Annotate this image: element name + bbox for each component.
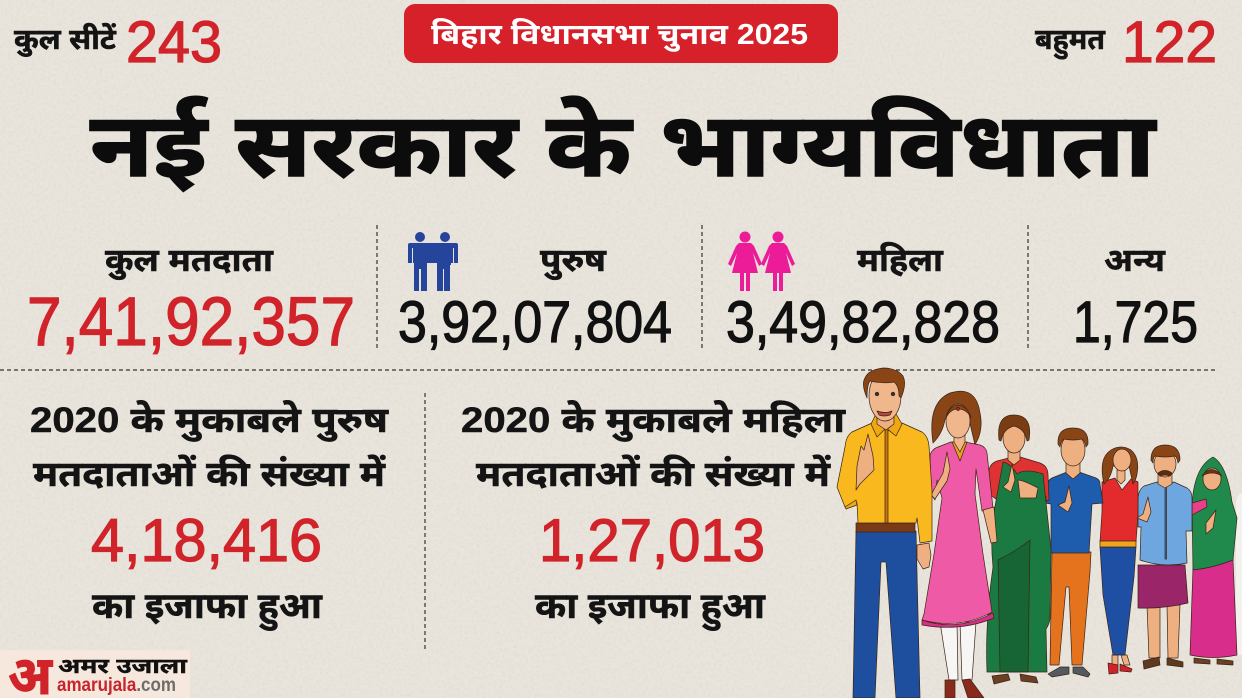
header pill	[404, 4, 838, 63]
stat: total voters: कुल मतदाता	[105, 242, 274, 280]
person 4: man in blue t-shirt	[1045, 428, 1103, 677]
total seats: 243	[126, 10, 222, 75]
panel: female voter increase	[461, 400, 846, 631]
person 5: woman in red top	[1100, 447, 1138, 674]
logo: अमर उजाला	[58, 655, 188, 678]
panel: male voter increase	[30, 400, 389, 631]
title: नई सरकार के भाग्यविधाता	[90, 95, 1157, 195]
person 3: woman in green saree	[987, 415, 1051, 684]
majority: 122	[1122, 10, 1217, 75]
person 2: woman in pink kurta	[922, 391, 997, 698]
panel: female voter increase: 1,27,013	[539, 507, 765, 574]
stat: female voters	[726, 232, 1000, 355]
icon: two women	[728, 232, 795, 291]
panel: female voter increase: मतदाताओं की संख्या में	[476, 454, 831, 494]
total seats: कुल सीटें	[14, 23, 117, 57]
icon: two men	[408, 232, 458, 291]
majority: बहुमत	[1035, 24, 1106, 60]
header pill: बिहार विधानसभा चुनाव 2025	[431, 18, 808, 52]
illustration: voters	[837, 368, 1242, 698]
stat: male voters: पुरुष	[540, 242, 607, 280]
majority	[1035, 10, 1217, 75]
stat: other voters: 1,725	[1073, 290, 1198, 355]
logo	[0, 646, 190, 698]
stat: total voters: 7,41,92,357	[27, 283, 355, 360]
person 1: man in yellow shirt	[837, 368, 932, 698]
panel: male voter increase: का इजाफा हुआ	[92, 585, 323, 631]
stat: male voters	[398, 232, 672, 355]
total seats	[14, 10, 222, 75]
stat: female voters: महिला	[857, 242, 944, 278]
person 8 edge	[1236, 493, 1242, 655]
panel: female voter increase: का इजाफा हुआ	[535, 585, 766, 631]
logo: amarujala.com	[57, 675, 176, 696]
stat: other voters: अन्य	[1104, 242, 1166, 278]
person 6: man in blue shirt	[1137, 445, 1192, 669]
stat: male voters: 3,92,07,804	[398, 290, 672, 355]
stat: total voters	[27, 242, 355, 360]
panel: male voter increase: मतदाताओं की संख्या में	[33, 454, 386, 494]
panel: female voter increase: 2020 के मुकाबले महिला	[461, 400, 846, 442]
panel: male voter increase: 4,18,416	[91, 507, 322, 574]
panel: male voter increase: 2020 के मुकाबले पुरुष	[30, 400, 389, 442]
stat: other voters	[1073, 242, 1198, 355]
person 7: woman in green dupatta	[1190, 457, 1237, 665]
stat: female voters: 3,49,82,828	[726, 290, 1000, 355]
